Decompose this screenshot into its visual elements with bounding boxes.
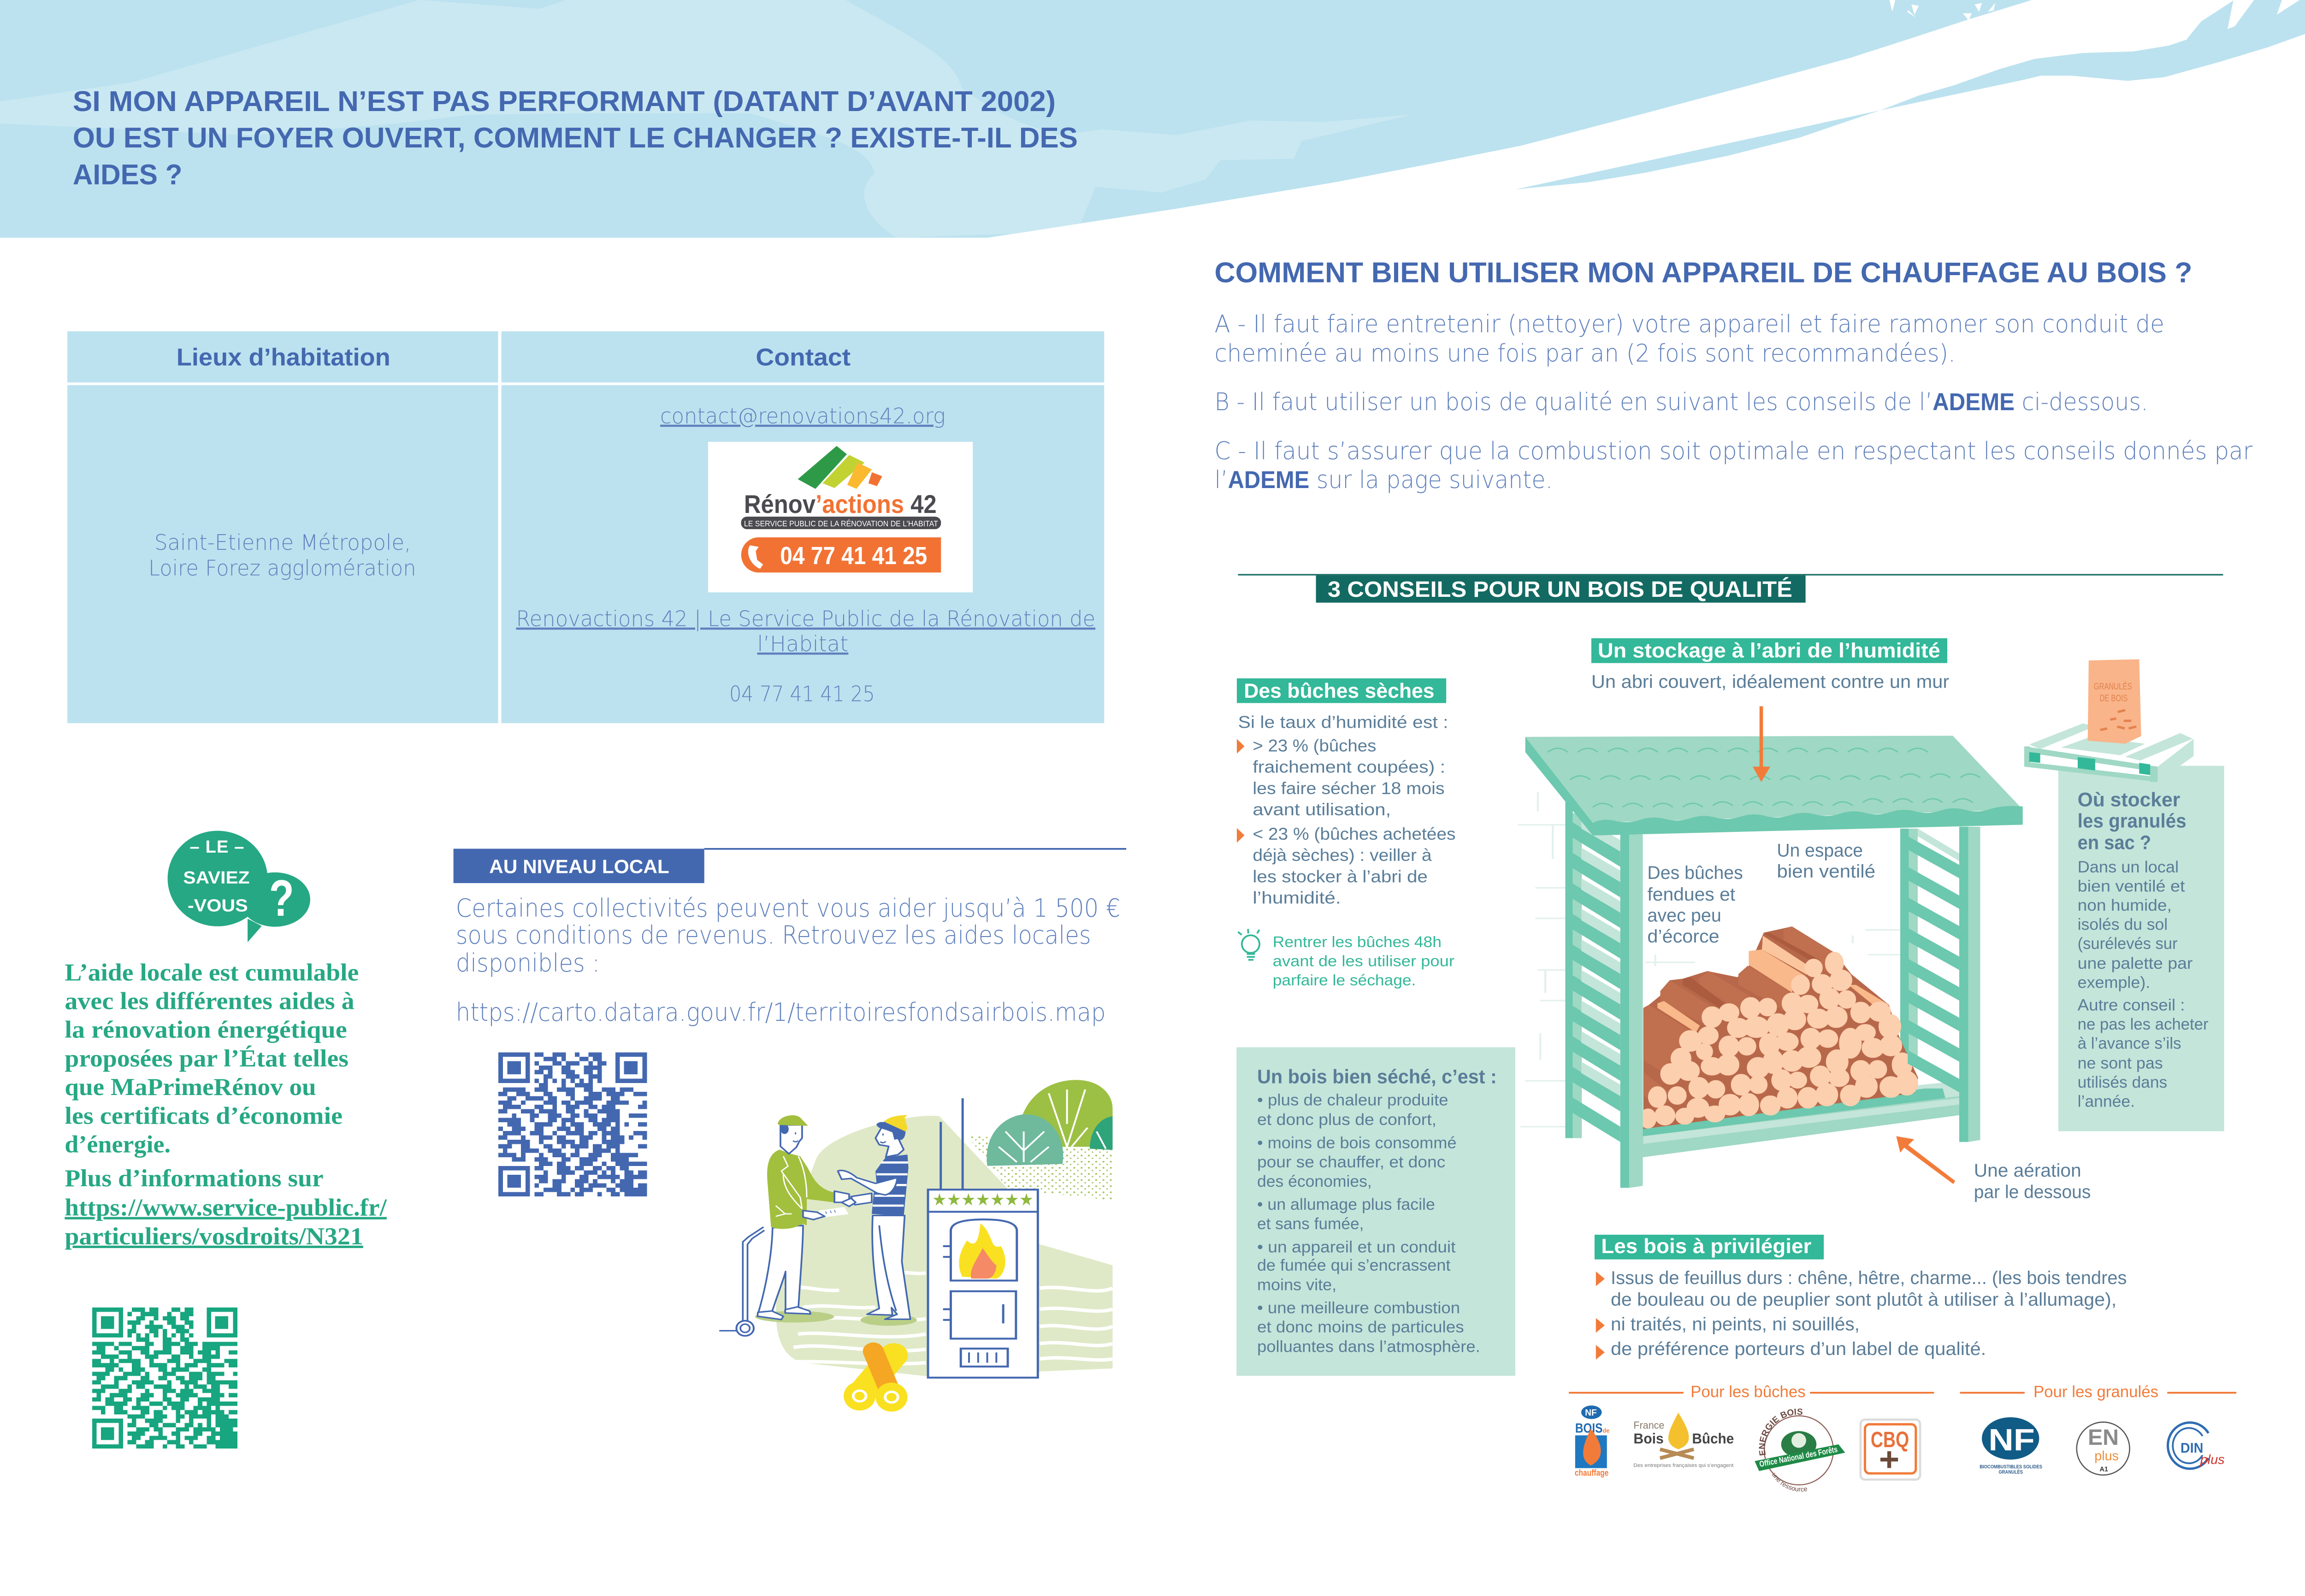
phone number: 04 77 41 41 25 — [729, 681, 875, 706]
panel heading — [2078, 789, 2187, 854]
icon: light bulb — [1238, 929, 1259, 960]
column title: lieux: Lieux d’habitation — [177, 344, 390, 371]
panel body: utilisés dans — [2078, 1073, 2167, 1091]
logo: NF granulés: BIOCOMBUSTIBLES SOLIDES — [1980, 1464, 2042, 1470]
title — [73, 86, 1078, 191]
icon: pellet bag on pallet: GRANULÉS — [2094, 681, 2132, 692]
logo: France Bois Bûche: Des entreprises françaises qui s’engagent — [1633, 1463, 1734, 1468]
local aid text: disponibles : — [456, 948, 600, 978]
speech bubble: le saviez-vous: SAVIEZ — [183, 868, 250, 888]
logo: CBQ+ — [1861, 1419, 1920, 1479]
QR code: green — [92, 1310, 237, 1446]
humidity text: fraichement coupées) : — [1253, 758, 1445, 777]
benefits list: de fumée qui s’encrassent — [1257, 1256, 1451, 1274]
shelter label: bûches fendues — [1647, 863, 1743, 947]
shelter label: espace ventilé: Un espace — [1777, 840, 1863, 860]
shelter label: espace ventilé: bien ventilé — [1777, 861, 1875, 882]
benefits list: et sans fumée, — [1257, 1215, 1364, 1233]
panel body — [2078, 858, 2209, 1111]
panel body: une palette par — [2078, 954, 2193, 972]
panel body: (surélevés sur — [2078, 935, 2178, 953]
shelter caption: Un abri couvert, idéalement contre un mur — [1591, 672, 1949, 692]
label: Les bois à privilégier — [1601, 1235, 1811, 1258]
logo: DIN plus — [2168, 1423, 2225, 1469]
shelter label: bûches fendues: d’écorce — [1647, 926, 1720, 947]
panel body: non humide, — [2078, 896, 2172, 914]
advice A: A - Il faut faire entretenir (nettoyer) votre appareil et faire ramoner son conduit de — [1214, 310, 2164, 338]
green text: aide locale cumulable: proposées par l’État telles — [65, 1045, 349, 1072]
heading: comment bien utiliser: COMMENT BIEN UTILISER MON APPAREIL DE CHAUFFAGE AU BOIS ? — [1214, 257, 2192, 289]
title: AIDES ? — [73, 159, 182, 191]
arrow: down to roof — [1753, 706, 1770, 782]
humidity text: > 23 % (bûches — [1253, 736, 1376, 755]
section bar: au niveau local: AU NIVEAU LOCAL — [489, 855, 669, 877]
shelter label: aération: par le dessous — [1974, 1182, 2091, 1202]
icon: pellet bag on pallet — [2024, 659, 2194, 782]
logo: EN plus: plus — [2094, 1449, 2119, 1464]
advice C: l’ADEME sur la page suivante. — [1214, 466, 1553, 494]
advice A — [1214, 310, 2164, 368]
panel: les bois à privilégier — [1595, 1235, 2127, 1360]
list text: Issus de feuillus durs : chêne, hêtre, charme... (les bois tendres — [1611, 1268, 2127, 1288]
logo: Energie Bois: ENERGIE BOIS — [1757, 1407, 1803, 1456]
list text: de préférence porteurs d’un label de qualité. — [1611, 1339, 1986, 1359]
benefits list: • une meilleure combustion — [1257, 1299, 1460, 1317]
logo: France Bois Bûche: Bois — [1633, 1430, 1664, 1447]
advice A: cheminée au moins une fois par an (2 fois sont recommandées). — [1214, 340, 1956, 368]
panel body: bien ventilé et — [2078, 878, 2185, 895]
tip text: parfaire le séchage. — [1273, 972, 1416, 989]
table header: lieux — [67, 331, 498, 383]
table cell: contact — [502, 385, 1104, 723]
logo: NF bois de chauffage: BOIS — [1575, 1421, 1602, 1436]
panel body: isolés du sol — [2078, 916, 2168, 934]
list text: de bouleau ou de peuplier sont plutôt à utiliser à l’allumage), — [1611, 1290, 2116, 1310]
green text: aide locale cumulable: particuliers/vosdroits/N321 — [65, 1223, 363, 1250]
places text: Saint-Etienne Métropole, — [154, 530, 411, 555]
green text: aide locale cumulable: https://www.service-public.fr/ — [65, 1195, 387, 1221]
logo: Energie Bois: une ressource — [1770, 1471, 1808, 1493]
legend: pour les bûches: Pour les bûches — [1690, 1383, 1806, 1401]
panel heading: les granulés — [2078, 810, 2187, 832]
logo: Energie Bois — [1755, 1407, 1845, 1493]
speech bubble: le saviez-vous: ? — [269, 869, 294, 927]
logo: France Bois Bûche — [1633, 1413, 1734, 1468]
shelter label: aération — [1974, 1160, 2091, 1202]
panel body: ne pas les acheter — [2078, 1015, 2209, 1033]
stars rating: ★★★★★★★ — [932, 1190, 1034, 1209]
humidity text: déjà sèches) : veiller à — [1253, 846, 1432, 865]
email link: contact@renovations42.org — [660, 404, 946, 429]
local aid text — [456, 894, 1120, 978]
benefits list — [1257, 1091, 1480, 1356]
panel: un bois bien séché — [1236, 1047, 1515, 1376]
speech bubble: le saviez-vous — [168, 831, 310, 942]
panel body: à l’avance s’ils — [2078, 1035, 2181, 1053]
humidity text: avant utilisation, — [1253, 800, 1391, 819]
list markers — [1596, 1272, 1605, 1360]
front left post and slats — [1570, 817, 1643, 1188]
logo Rénov'actions 42: Rénov’actions 42 — [744, 489, 937, 518]
benefits list: • un allumage plus facile — [1257, 1196, 1435, 1213]
logo: NF bois de chauffage: chauffage — [1575, 1468, 1608, 1478]
logo: DIN plus: DIN — [2181, 1441, 2203, 1456]
rack bottom — [1643, 1081, 1959, 1157]
website link: l’Habitat — [757, 631, 848, 656]
contact table — [67, 331, 1104, 723]
shelter label: espace ventilé — [1777, 840, 1875, 882]
logo: NF bois de chauffage: NF — [1585, 1408, 1597, 1418]
benefits list: polluantes dans l’atmosphère. — [1257, 1338, 1480, 1356]
illustration background and stove — [771, 1080, 1112, 1412]
figures: two men shaking hands — [719, 1115, 917, 1336]
green text: aide locale cumulable: que MaPrimeRénov ou — [65, 1074, 316, 1101]
green text: aide locale cumulable: Plus d’informations sur — [65, 1165, 324, 1192]
green text: aide locale cumulable: la rénovation énergétique — [65, 1017, 347, 1043]
logo Rénov'actions 42: 04 77 41 41 25 — [780, 542, 927, 570]
section bar: au niveau local — [454, 849, 1126, 883]
panel body: l’année. — [2078, 1093, 2135, 1111]
wall bricks — [1518, 792, 1900, 1127]
log pile — [1642, 926, 1918, 1129]
list text — [1611, 1268, 2127, 1359]
logo: NF granulés: GRANULÉS — [1998, 1469, 2023, 1475]
green text: aide locale cumulable: les certificats d’économie — [65, 1102, 343, 1129]
title: SI MON APPAREIL N’EST PAS PERFORMANT (DATANT D’AVANT 2002) — [73, 86, 1056, 118]
website link: Renovactions 42 | Le Service Public de la Rénovation de — [516, 607, 1095, 632]
QR code: blue — [498, 1054, 647, 1194]
logo: France Bois Bûche: Bûche — [1692, 1430, 1734, 1447]
logo: Energie Bois: Office National des Forêts — [1759, 1444, 1838, 1469]
url: carto datara: https://carto.datara.gouv.fr/1/territoiresfondsairbois.map — [456, 998, 1105, 1027]
panel body: ne sont pas — [2078, 1054, 2163, 1072]
advice C — [1214, 437, 2253, 494]
advice paragraphs — [1214, 310, 2253, 494]
benefits list: pour se chauffer, et donc — [1257, 1153, 1445, 1171]
front right post and slats — [1908, 827, 1980, 1142]
icon: pellet bag on pallet: DE BOIS — [2099, 693, 2128, 703]
humidity text — [1237, 713, 1456, 907]
logo Rénov'actions 42: LE SERVICE PUBLIC DE LA RÉNOVATION DE L’HABITAT — [744, 519, 938, 528]
panel body: exemple). — [2078, 974, 2150, 992]
back right post — [1900, 829, 1918, 1066]
illustration: wood shelter — [1518, 706, 2023, 1188]
tip text — [1273, 934, 1454, 989]
panel: bûches sèches — [1237, 678, 1456, 989]
logo: France Bois Bûche: France — [1633, 1419, 1664, 1431]
shelter label: bûches fendues: Des bûches — [1647, 863, 1743, 883]
benefits list: et donc moins de particules — [1257, 1318, 1464, 1336]
humidity text: l’humidité. — [1253, 888, 1341, 907]
logo: NF granulés — [1980, 1417, 2042, 1475]
logo: NF bois de chauffage: de — [1602, 1427, 1609, 1434]
section bar: 3 conseils: 3 CONSEILS POUR UN BOIS DE QUALITÉ — [1328, 577, 1792, 602]
website link — [516, 607, 1095, 656]
illustration: installer and stove — [719, 1080, 1112, 1412]
panel body: Dans un local — [2078, 858, 2179, 876]
logo: NF bois de chauffage — [1575, 1406, 1609, 1478]
roof — [1525, 736, 2023, 836]
header band — [0, 0, 2305, 238]
advice C: C - Il faut s’assurer que la combustion soit optimale en respectant les conseils donnés par — [1214, 437, 2253, 465]
legend: pour les granulés: Pour les granulés — [2033, 1383, 2158, 1401]
benefits list: • moins de bois consommé — [1257, 1134, 1456, 1152]
panel heading: Où stocker — [2078, 789, 2180, 811]
green text: aide locale cumulable: L’aide locale est cumulable — [65, 959, 359, 986]
speech bubble: le saviez-vous: -VOUS — [188, 895, 248, 915]
logo Rénov'actions 42 — [708, 442, 973, 592]
benefits list: et donc plus de confort, — [1257, 1111, 1436, 1129]
panel heading: en sac ? — [2078, 831, 2151, 854]
places text: Loire Forez agglomération — [148, 556, 416, 581]
local aid text: sous conditions de revenus. Retrouvez les aides locales — [456, 921, 1091, 950]
green text: aide locale cumulable — [65, 959, 387, 1250]
label: des bûches sèches: Des bûches sèches — [1244, 680, 1435, 702]
column title: contact: Contact — [756, 344, 851, 371]
green text: aide locale cumulable: avec les différentes aides à — [65, 988, 355, 1014]
tip text: Rentrer les bûches 48h — [1273, 934, 1442, 951]
humidity text: les faire sécher 18 mois — [1253, 779, 1445, 798]
advice B: B - Il faut utiliser un bois de qualité en suivant les conseils de l’ADEME ci-dessous. — [1214, 388, 2148, 416]
logo: EN plus: A1 — [2099, 1466, 2108, 1473]
panel: où stocker les granulés — [2058, 766, 2224, 1131]
logo: EN plus — [2077, 1422, 2130, 1475]
speech bubble: le saviez-vous: – LE – — [189, 837, 244, 857]
list text: ni traités, ni peints, ni souillés, — [1611, 1314, 1860, 1334]
humidity text: Si le taux d’humidité est : — [1238, 713, 1448, 732]
arrow: up to underside — [1896, 1136, 1955, 1184]
logo: NF granulés: NF — [1988, 1423, 2035, 1457]
logo: CBQ+: CBQ — [1871, 1428, 1909, 1452]
back left post — [1565, 802, 1582, 1138]
humidity text: les stocker à l’abri de — [1253, 867, 1428, 886]
table cell: lieux — [67, 385, 498, 723]
section bar: 3 conseils — [1238, 575, 2223, 603]
panel heading: Un bois bien séché, c’est : — [1257, 1066, 1497, 1088]
benefits list: • un appareil et un conduit — [1257, 1238, 1456, 1256]
places text — [148, 530, 416, 581]
benefits list: moins vite, — [1257, 1276, 1336, 1294]
title: OU EST UN FOYER OUVERT, COMMENT LE CHANGER ? EXISTE-T-IL DES — [73, 122, 1078, 154]
benefits list: des économies, — [1257, 1172, 1372, 1190]
logo: EN plus: EN — [2088, 1425, 2119, 1450]
local aid text: Certaines collectivités peuvent vous aider jusqu’à 1 500 € — [456, 894, 1120, 923]
logo: DIN plus: plus — [2200, 1453, 2225, 1467]
humidity text: < 23 % (bûches achetées — [1253, 825, 1456, 843]
shelter label: bûches fendues: avec peu — [1647, 905, 1721, 925]
green text: aide locale cumulable: d’énergie. — [65, 1131, 171, 1158]
shelter label: bûches fendues: fendues et — [1647, 884, 1735, 905]
label: un stockage à l'abri: Un stockage à l’abri de l’humidité — [1598, 639, 1940, 662]
panel body: Autre conseil : — [2078, 996, 2185, 1014]
tip text: avant de les utiliser pour — [1273, 953, 1454, 970]
table header: contact — [502, 331, 1104, 383]
shelter label: aération: Une aération — [1974, 1160, 2081, 1181]
benefits list: • plus de chaleur produite — [1257, 1091, 1448, 1109]
